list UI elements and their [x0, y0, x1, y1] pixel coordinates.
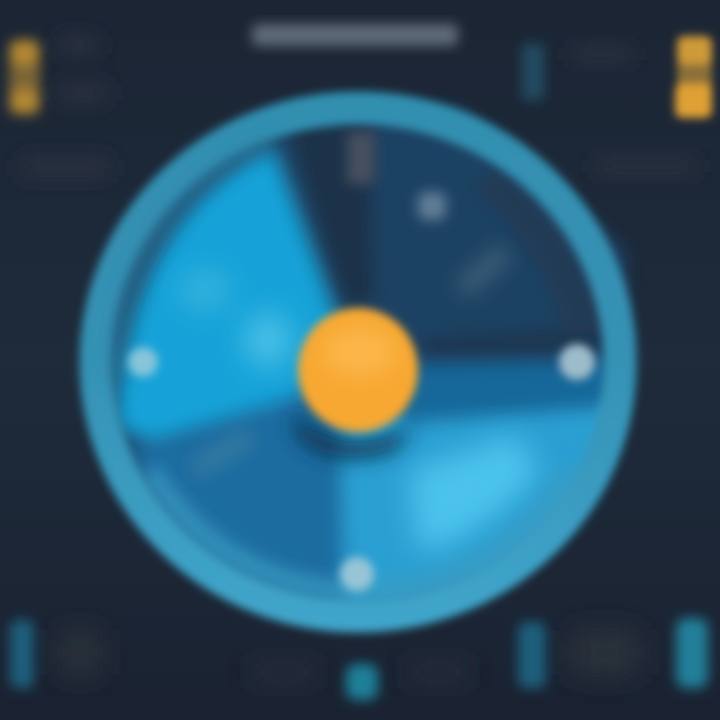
marker: top [347, 132, 375, 184]
marker: bottom [340, 557, 374, 591]
segment: dark rim right [470, 165, 610, 335]
segment: dark navy upper right [278, 110, 625, 365]
panel: top right badges [675, 36, 712, 118]
text block: top left lines [20, 36, 110, 176]
text block: top right lines [522, 44, 696, 174]
wheel segments [96, 108, 625, 616]
segment: lower right [340, 400, 620, 610]
segment: highlight hub side [244, 312, 292, 368]
segment: lower left [130, 395, 362, 610]
segment: dark wedge by divider [285, 120, 375, 310]
inner ring upper left [117, 142, 270, 380]
segment: highlight left [179, 270, 231, 310]
panel: top left badges [9, 40, 40, 114]
segment: band right [400, 360, 615, 424]
marker: left [128, 347, 158, 377]
segment: bright blue upper left [118, 150, 345, 440]
inner ring lower [150, 470, 570, 591]
panel: wheel [96, 108, 625, 616]
marker: upper right glyph [418, 192, 446, 220]
outer ring [96, 108, 620, 616]
hub highlight [324, 328, 396, 376]
segment: light highlight [410, 435, 540, 552]
segment: grey band lower left [195, 435, 250, 470]
marker: upper right text [462, 252, 505, 290]
panel: bottom bars [10, 618, 708, 700]
marker: right [559, 344, 595, 380]
center hub [298, 308, 418, 432]
title [252, 24, 458, 46]
text block: bottom lines [60, 630, 640, 680]
segment: dark band above right [420, 325, 610, 358]
center shadow [290, 410, 415, 458]
wheel disc base [96, 108, 620, 616]
